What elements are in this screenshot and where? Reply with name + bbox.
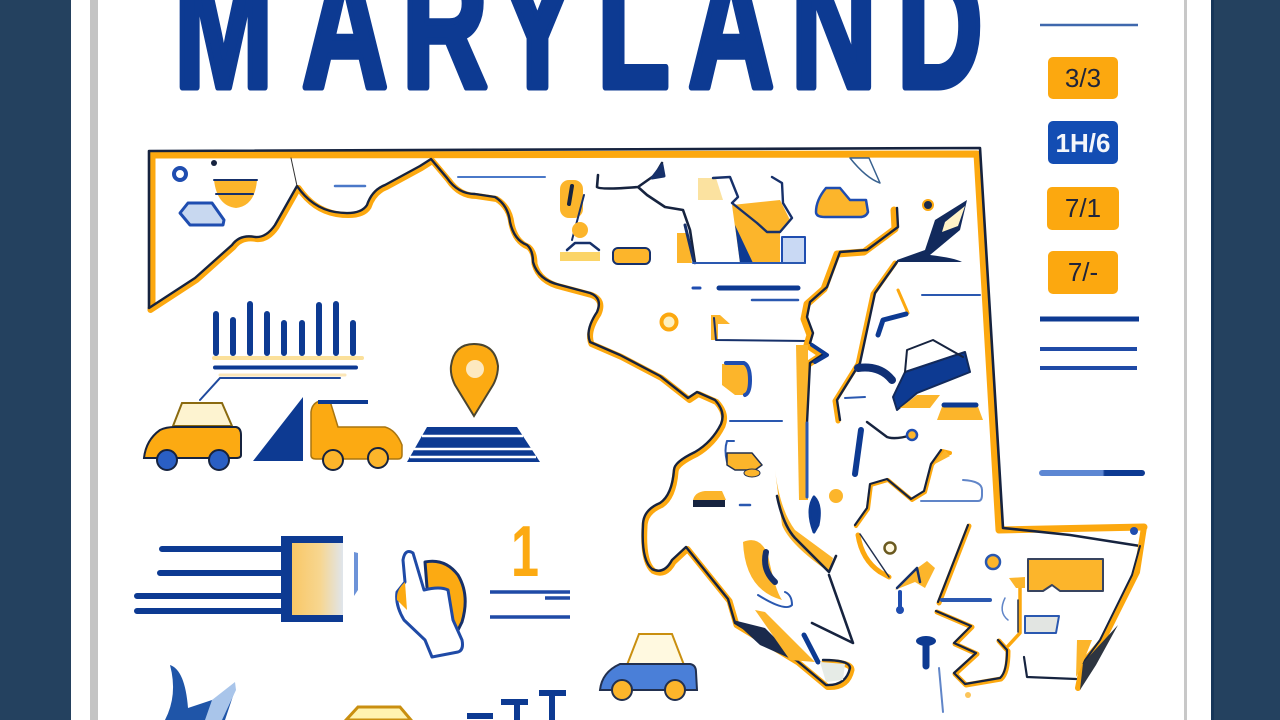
mid map details bbox=[693, 421, 853, 643]
icon: orange building block bbox=[1009, 559, 1103, 633]
badge 1: 3/3 bbox=[1065, 63, 1101, 93]
icon: striped road bbox=[407, 427, 540, 462]
icon: hand bbox=[397, 552, 465, 657]
map of Maryland bbox=[149, 148, 1144, 712]
icon: document with speed lines bbox=[137, 536, 358, 622]
side panel bbox=[1039, 25, 1145, 476]
southeast corner coast bbox=[1024, 527, 1144, 690]
icon: yellow car roof bbox=[346, 707, 411, 720]
icon: T-shaped posts bbox=[467, 693, 566, 720]
bar chart bbox=[200, 304, 362, 400]
bay shore south wedge bbox=[733, 610, 845, 682]
badge 1 bbox=[1048, 57, 1118, 99]
icon: blue shape bottom left bbox=[165, 665, 236, 720]
text lines under number mark bbox=[490, 592, 570, 617]
icon: dark vehicle on eastern shore bbox=[893, 340, 983, 420]
icon: location pin bbox=[451, 344, 498, 416]
central bay shoreline bbox=[796, 208, 898, 532]
badge 2: 1H/6 bbox=[1056, 128, 1110, 158]
map outline: north border and western coast bbox=[149, 148, 1144, 687]
badge 4 bbox=[1048, 251, 1118, 294]
badge 4: 7/- bbox=[1068, 257, 1098, 287]
icon: orange number mark: 1 bbox=[511, 512, 539, 592]
icon: navy ramp bbox=[253, 397, 303, 461]
badge 3: 7/1 bbox=[1065, 193, 1101, 223]
inland features, top centre bbox=[560, 158, 880, 395]
icon: orange car bbox=[144, 403, 241, 470]
eastern shore bbox=[835, 200, 980, 421]
icon: orange truck bbox=[311, 401, 402, 470]
icon: blue car bbox=[600, 634, 697, 700]
inland features, top left bbox=[174, 160, 545, 225]
southeast shoreline bbox=[855, 422, 1020, 712]
badge 2 bbox=[1048, 121, 1118, 164]
badge 3 bbox=[1047, 187, 1119, 230]
